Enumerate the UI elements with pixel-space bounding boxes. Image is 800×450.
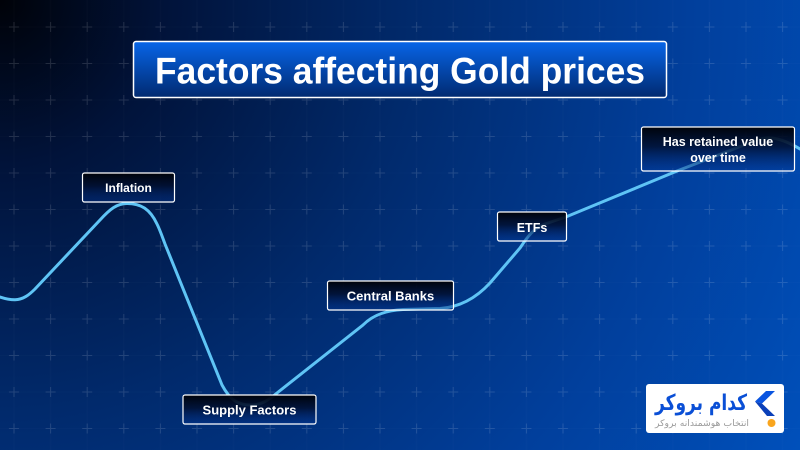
logo tagline: انتخاب هوشمندانه بروکر (654, 419, 749, 429)
label: ETFs: ETFs (517, 221, 547, 235)
gold price curve (0, 138, 800, 405)
logo card (646, 384, 784, 433)
title box: Factors affecting Gold prices (155, 50, 645, 92)
label: Supply Factors (183, 395, 316, 424)
label: Supply Factors: Supply Factors (203, 402, 296, 418)
label: Has retained value over time (642, 127, 794, 171)
label: Inflation: Inflation (105, 181, 152, 195)
label: Inflation (82, 173, 174, 202)
logo chevron mark (755, 391, 776, 427)
label: Central Banks (328, 281, 454, 310)
label: Has retained value over time: over time (690, 151, 746, 165)
label: Has retained value over time: Has retained value (663, 135, 773, 149)
logo wordmark: کدام بروکر (654, 391, 747, 416)
label: Central Banks: Central Banks (347, 288, 434, 304)
label: ETFs (498, 212, 566, 241)
